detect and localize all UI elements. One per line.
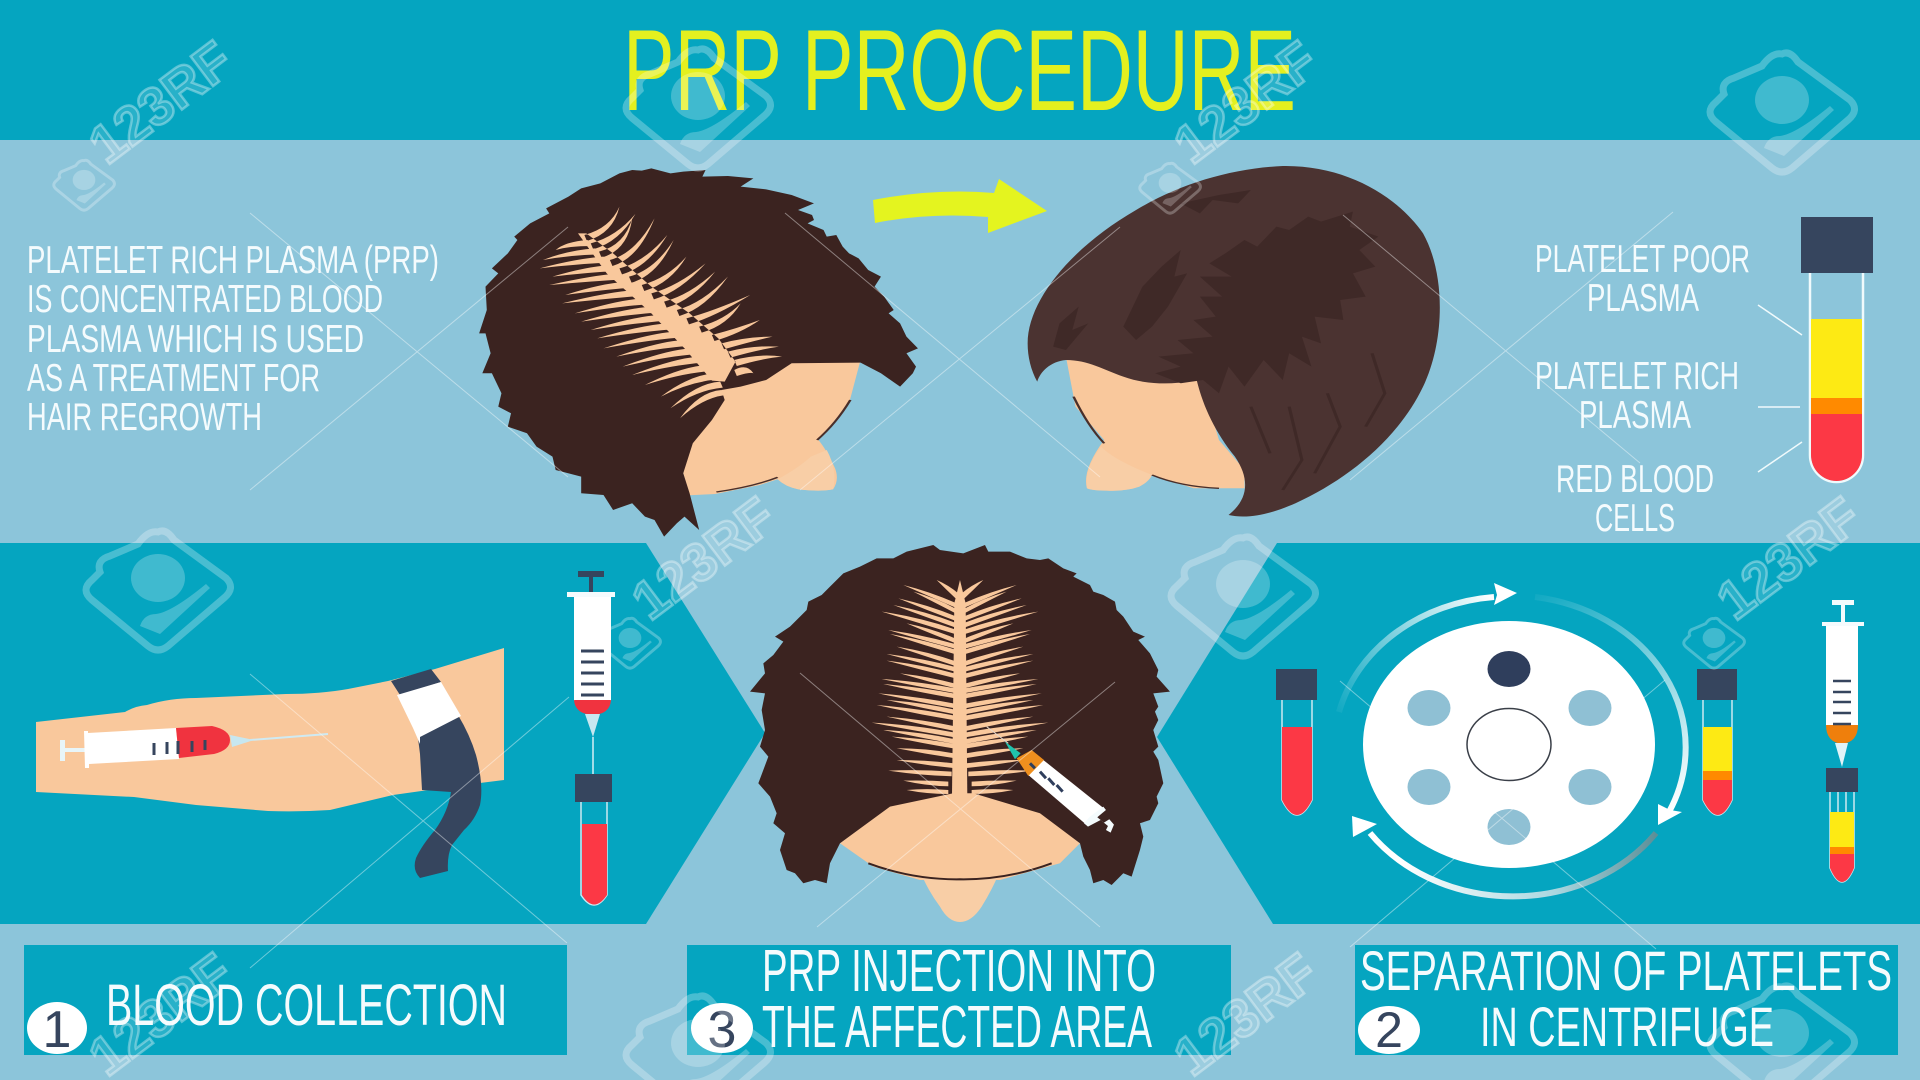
caption box 3 [687, 945, 1231, 1055]
nose of left head [778, 450, 834, 491]
text block: tube labels: CELLS [1595, 497, 1675, 540]
caption: separation of platelets [1355, 939, 1898, 1058]
caption box 1 [24, 945, 567, 1055]
text block: PRP description [27, 239, 439, 439]
yellow layer [1703, 727, 1732, 771]
arrow head left [1352, 816, 1377, 837]
rotor disk [1363, 621, 1655, 868]
leader line: rich plasma [1758, 406, 1800, 408]
caption text 3 line 1: PRP INJECTION INTO [762, 938, 1156, 1004]
text block: tube labels: PLATELET POOR [1535, 238, 1750, 281]
arm syringe tip [230, 735, 254, 747]
watermark: stock photo marks: 123RF [1163, 30, 1329, 176]
step number 3: 3 [708, 1001, 736, 1059]
blood in tube [582, 824, 607, 904]
flange [1822, 622, 1864, 626]
arm [36, 648, 504, 811]
barrel [1826, 626, 1858, 726]
panel: centrifuge background [1157, 543, 1920, 924]
watermark: stock photo marks: 123RF [78, 30, 244, 176]
tourniquet lower strap [415, 715, 481, 878]
injection syringe [987, 727, 1114, 833]
text block: tube labels: RED BLOOD [1556, 458, 1714, 501]
caption: PRP injection [687, 938, 1231, 1060]
face of right head [1066, 357, 1244, 491]
caption text 3 line 2: THE AFFECTED AREA [762, 994, 1152, 1060]
text block: tube labels: PLASMA [1587, 277, 1699, 320]
empty slots [1408, 690, 1612, 845]
leader line: poor plasma [1758, 305, 1802, 335]
text block: PRP description: PLATELET RICH PLASMA (PRP) [27, 239, 439, 282]
red layer [1830, 854, 1854, 882]
text block: PRP description: IS CONCENTRATED BLOOD [27, 278, 383, 321]
tube cap [1801, 217, 1873, 273]
tube walls [1810, 273, 1863, 482]
head: restored hair after treatment [1028, 166, 1440, 516]
header band [0, 0, 1920, 140]
illustration: syringe drawing platelet rich plasma [1822, 600, 1864, 882]
step badge 2 [1358, 1006, 1420, 1054]
hair of centre head [750, 545, 1170, 885]
hair of left head [479, 168, 918, 537]
text block: tube labels [1535, 238, 1750, 540]
illustration: centrifuge rotor [1363, 621, 1655, 868]
arrow arc bottom [1370, 833, 1656, 896]
step badge 1 [27, 1002, 87, 1054]
illustration: syringe filling tube with blood [567, 571, 615, 905]
illustration: tube after centrifuge [1697, 669, 1737, 815]
graduation marks [581, 651, 604, 695]
injection needle [987, 727, 1008, 743]
text block: tube labels: PLASMA [1579, 394, 1691, 437]
tube cap [575, 774, 612, 802]
text block: PRP description: AS A TREATMENT FOR [27, 357, 320, 400]
arm syringe plunger [60, 740, 87, 761]
illustration: rotation arrows [1339, 583, 1686, 896]
tube walls [1830, 792, 1854, 882]
tip [585, 714, 600, 737]
tube walls [1703, 700, 1732, 815]
arm syringe marks [154, 740, 205, 755]
needle [592, 737, 594, 774]
orange plasma in syringe [1826, 725, 1858, 744]
arrow arc upper left [1339, 597, 1494, 712]
injection tip [1005, 742, 1021, 759]
brow line of right head [1074, 397, 1219, 488]
blood in syringe [574, 700, 611, 715]
platelet poor plasma layer [1811, 319, 1862, 398]
arrow arc right [1535, 597, 1686, 812]
flange [567, 592, 615, 597]
hair shadow of right head [1053, 190, 1378, 393]
injection barrel [1028, 760, 1105, 825]
arm syringe blood [176, 726, 230, 758]
step number 2: 2 [1375, 1002, 1403, 1058]
text block: PRP description: PLASMA WHICH IS USED [27, 318, 364, 361]
leader line: red cells [1758, 442, 1802, 472]
red blood cells layer [1811, 414, 1862, 481]
brow line of left head [716, 400, 850, 492]
platelet rich plasma layer [1811, 398, 1862, 414]
watermark: stock photo marks: 123RF [1706, 486, 1872, 632]
illustration: whole blood tube [1276, 669, 1317, 815]
tube walls [1282, 700, 1312, 815]
hair of right head [1028, 166, 1440, 516]
arm syringe needle [250, 734, 328, 740]
loaded tube slot [1488, 651, 1530, 687]
watermark: stock photo marks: 123RF [621, 486, 787, 632]
cap [1697, 669, 1737, 700]
arrow head upper [1494, 583, 1517, 605]
caption text 2 line 2: IN CENTRIFUGE [1480, 995, 1774, 1058]
cap [1826, 768, 1858, 792]
orange layer [1703, 771, 1732, 780]
step number 1: 1 [43, 1001, 71, 1059]
rotor hub [1467, 708, 1551, 780]
plunger [578, 571, 604, 592]
step badge 3 [691, 1003, 753, 1053]
tube walls [581, 802, 607, 905]
illustration: arm with tourniquet and syringe [36, 648, 504, 878]
text block: PRP description: HAIR REGROWTH [27, 396, 262, 439]
title: PRP PROCEDURE [623, 7, 1296, 135]
head: scalp injection [750, 545, 1170, 922]
barrel [574, 597, 611, 701]
caption box 2 [1355, 945, 1898, 1055]
head: thinning hair before treatment [479, 168, 918, 537]
yellow layer [1830, 812, 1854, 847]
graduation marks [1833, 681, 1851, 724]
text block: tube labels: PLATELET RICH [1535, 355, 1739, 398]
tourniquet upper strap [391, 669, 441, 695]
cap [1276, 669, 1317, 700]
blood [1282, 727, 1312, 815]
caption text 1: BLOOD COLLECTION [106, 973, 507, 1038]
scalp parting of centre head [872, 580, 1048, 797]
caption: blood collection [24, 945, 567, 1059]
face of left head [683, 360, 861, 495]
injection marks [1030, 763, 1063, 792]
plunger [1832, 600, 1854, 622]
panel: blood collection background [0, 543, 765, 924]
hair streaks of right head [1251, 353, 1385, 490]
nose of centre head [923, 879, 997, 922]
scalp parting of left head [540, 207, 782, 418]
arrow: before to after [873, 179, 1047, 233]
arm syringe barrel [84, 728, 179, 768]
face of centre head [840, 790, 1080, 880]
arrow head right [1658, 804, 1682, 825]
tip [1835, 743, 1848, 767]
red layer [1703, 780, 1732, 815]
injection plunger [1084, 807, 1114, 833]
nose of right head [1086, 447, 1152, 491]
tourniquet white band [397, 682, 461, 744]
injection plasma [1017, 750, 1044, 776]
diagram: separated blood tube [1758, 217, 1873, 482]
orange layer [1830, 847, 1854, 854]
brow line of centre head [868, 863, 1052, 879]
